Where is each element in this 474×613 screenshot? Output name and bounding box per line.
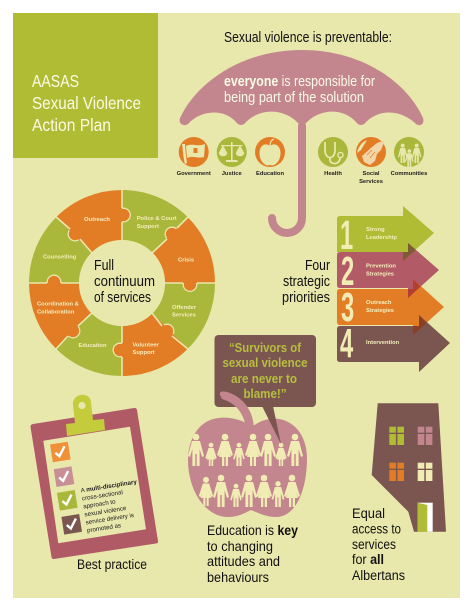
- heading: four strategic priorities: Four: [305, 258, 330, 274]
- equal access text: [352, 506, 405, 583]
- icon: health stethoscope: [318, 137, 348, 177]
- icon: government: Government: [177, 171, 211, 177]
- clipboard text: promoted as: [87, 522, 122, 534]
- clip: [66, 395, 105, 436]
- speech bubble quote: sexual violence: [222, 356, 308, 370]
- heading: four strategic priorities: priorities: [282, 290, 330, 306]
- speech bubble quote: are never to: [231, 372, 297, 386]
- icon: communities people: Communities: [391, 171, 427, 177]
- speech bubble quote: blame!”: [244, 387, 286, 401]
- clipboard text: cross-sectional: [82, 489, 123, 502]
- icon: social services hands: Services: [359, 179, 383, 185]
- equal access text: for all: [352, 552, 384, 567]
- equal access text: services: [352, 537, 396, 552]
- strategic priority arrows: Outreach: [366, 300, 392, 306]
- segment dividers: [28, 189, 216, 377]
- icon: social services hands: [356, 137, 386, 185]
- strategic priority arrows: Leadership: [366, 235, 397, 241]
- clipboard text: service delivery is: [85, 512, 135, 526]
- icon: justice: [217, 137, 247, 177]
- wheel labels: Support: [132, 350, 155, 356]
- best practice label: Best practice: [77, 557, 147, 572]
- apple with people: [188, 418, 307, 517]
- checkboxes: [50, 442, 71, 462]
- windows: [389, 427, 404, 445]
- education text: Education is key: [207, 522, 298, 538]
- service wheel: continuum: [94, 273, 155, 290]
- heading: four strategic priorities: [282, 258, 330, 306]
- strategic priority arrows: Prevention: [366, 264, 396, 270]
- wheel centre: [79, 240, 165, 326]
- equal access text: Equal: [352, 506, 385, 521]
- arrow 4: [337, 315, 450, 372]
- clipboard text: [80, 479, 138, 534]
- wheel labels: Coordination &: [37, 302, 79, 308]
- icon: social services hands: Social: [362, 171, 380, 177]
- wheel labels: Volunteer: [132, 342, 160, 348]
- speech bubble quote: [214, 335, 316, 444]
- title block: [13, 13, 158, 158]
- umbrella: [180, 50, 423, 233]
- arrow 3: [337, 279, 444, 335]
- wheel labels: Outreach: [84, 217, 110, 223]
- icon: communities people: [391, 137, 427, 177]
- service wheel: of services: [94, 289, 151, 306]
- strategic priority arrows: Strategies: [366, 272, 394, 278]
- puzzle tabs: [47, 208, 197, 357]
- icon: education apple: Education: [256, 171, 284, 177]
- wheel labels: Services: [172, 312, 196, 318]
- service wheel: Full: [94, 257, 114, 274]
- speech bubble quote: “Survivors of: [229, 341, 302, 355]
- green segments: [29, 190, 215, 376]
- umbrella: being part of the solution: [224, 90, 364, 106]
- clipboard text: approach to: [83, 498, 117, 510]
- strategic priority arrows: [337, 206, 450, 372]
- wheel labels: [37, 216, 197, 356]
- clipboard text: A multi-disciplinary: [80, 479, 138, 494]
- wheel labels: Crisis: [178, 258, 194, 264]
- heading: four strategic priorities: strategic: [283, 274, 330, 290]
- icon: justice: Justice: [222, 171, 242, 177]
- title block: Action Plan: [32, 115, 111, 135]
- strategic priority arrows: Strong: [366, 227, 385, 233]
- heading: sexual violence is preventable: Sexual violence is preventable:: [224, 30, 392, 46]
- service wheel: [28, 189, 216, 377]
- strategic priority arrows: 4: [340, 322, 353, 367]
- wheel labels: Offender: [172, 305, 197, 311]
- equal access text: Albertans: [352, 568, 405, 583]
- icon: government: [177, 137, 211, 177]
- education text: [207, 522, 298, 585]
- icon: health stethoscope: Health: [324, 171, 342, 177]
- strategic priority arrows: Strategies: [366, 308, 394, 314]
- clipboard text: sexual violence: [84, 505, 127, 518]
- equal access text: access to: [352, 522, 401, 536]
- education text: attitudes and: [207, 553, 280, 569]
- education text: behaviours: [207, 569, 269, 585]
- arrow 2: [337, 243, 439, 298]
- wheel labels: Education: [78, 343, 107, 349]
- strategic priority arrows: 3: [341, 286, 354, 331]
- building: [372, 403, 446, 532]
- wheel labels: Collaboration: [37, 310, 75, 316]
- strategic priority arrows: 1: [340, 214, 353, 259]
- wheel labels: Police & Court: [137, 216, 177, 222]
- wheel labels: Counselling: [43, 254, 77, 260]
- icon: education apple: [255, 137, 285, 177]
- title block: Sexual Violence: [32, 93, 141, 113]
- clipboard: [30, 395, 158, 559]
- arrow 1: [337, 206, 434, 261]
- orange segments: [29, 190, 215, 376]
- education text: to changing: [207, 538, 273, 554]
- wheel labels: Support: [137, 224, 159, 230]
- door: [418, 503, 433, 532]
- strategic priority arrows: 2: [341, 250, 354, 295]
- title block: AASAS: [32, 71, 79, 91]
- umbrella: everyone is responsible for: [224, 74, 375, 90]
- strategic priority arrows: Intervention: [366, 340, 400, 346]
